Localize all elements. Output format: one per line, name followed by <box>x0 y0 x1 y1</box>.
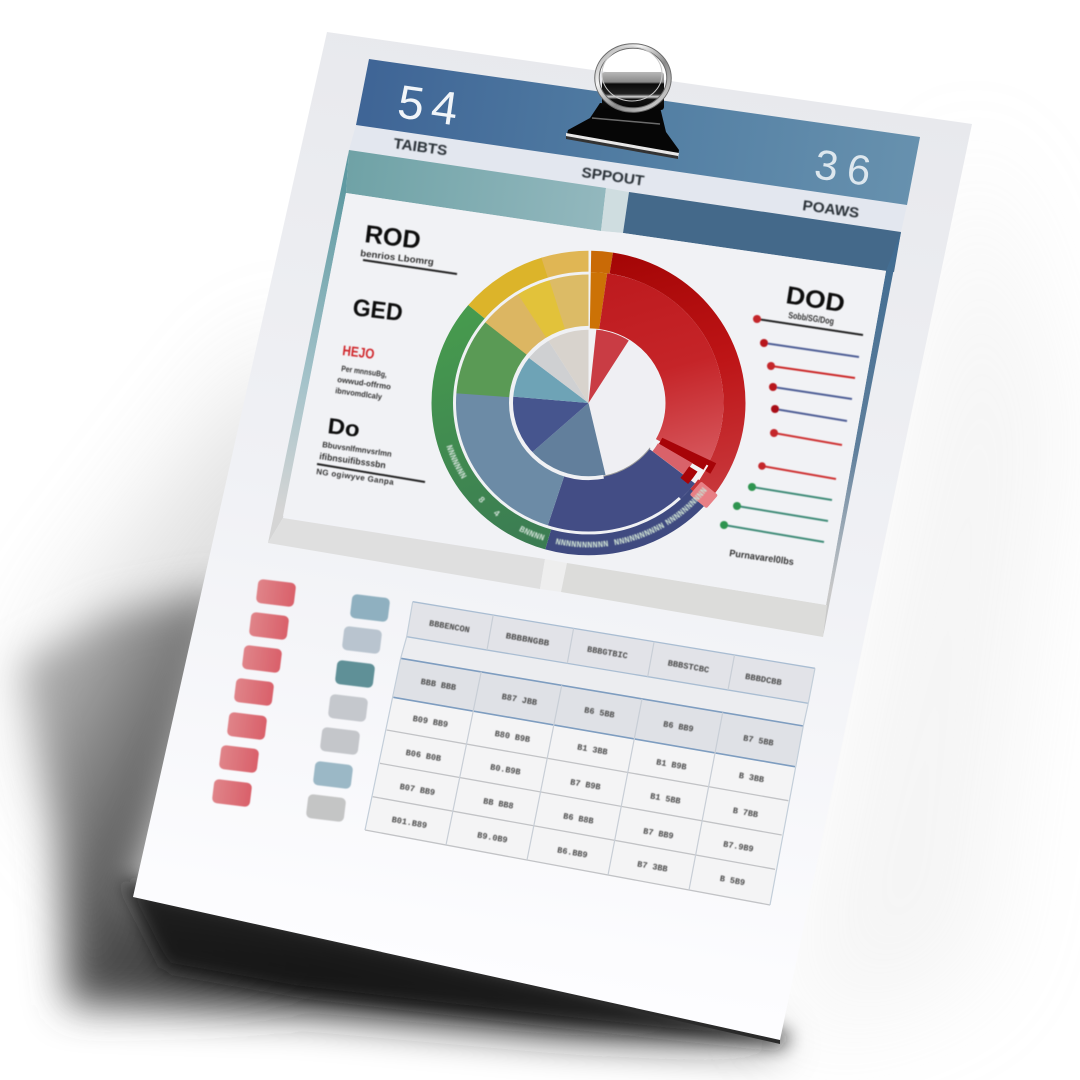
header row: BBBDCBB <box>744 672 782 688</box>
data row 2: B1 5BB <box>649 791 681 807</box>
sub header row: B87 JBB <box>501 692 538 708</box>
ring text: 4 <box>494 510 500 517</box>
Do caption: Bbuvsnlfmnvsrlmn <box>322 440 392 459</box>
left text column: NG ogiwyve Ganpa <box>316 467 395 487</box>
header row: BBBENCON <box>428 619 470 636</box>
heading Do: Do <box>326 413 361 442</box>
header row: BBBSTCBC <box>667 658 710 676</box>
clip ring <box>597 46 669 110</box>
label strip <box>349 125 907 232</box>
paragraph <box>335 364 392 402</box>
report header <box>268 59 920 637</box>
data row 3: B7.9B9 <box>722 839 754 855</box>
data row 4: B01.B89 <box>391 815 428 831</box>
data row 1: B1 B9B <box>655 757 687 773</box>
ring text: NNNNNNNNNN <box>664 486 708 526</box>
table rules <box>365 602 815 905</box>
table fills <box>365 602 815 905</box>
clip body <box>566 103 679 159</box>
inner ring segments <box>482 300 694 506</box>
data row 2: B 7BB <box>732 806 759 820</box>
paragraph: owwud-offrmo <box>337 375 392 392</box>
centre pie <box>550 366 626 440</box>
sub header row: B7 5BB <box>742 733 774 749</box>
data table <box>365 602 815 905</box>
legend line 5 <box>771 405 847 421</box>
sub header row: BBB BBB <box>420 677 457 693</box>
heading DOD: DOD <box>784 281 847 318</box>
data row 3: B6 B8B <box>562 811 594 827</box>
data row 1: B80 B9B <box>494 729 531 745</box>
ROD caption: benrios Lbomrg <box>360 248 434 267</box>
ring text: NNNNNNN <box>446 444 468 480</box>
data row 1: B 3BB <box>738 771 765 785</box>
data row 3 <box>399 782 754 855</box>
band gap <box>601 188 629 233</box>
white separator rings <box>454 273 722 533</box>
outer ring segments <box>442 261 734 545</box>
header row: BBBGTBIC <box>586 645 628 662</box>
left side strip <box>268 150 349 543</box>
dark blue band <box>623 192 901 272</box>
right legend <box>720 281 863 568</box>
data row 3: BB BB8 <box>482 796 514 812</box>
white chart panel <box>283 193 886 605</box>
legend line 7 <box>758 462 836 479</box>
data row 3: B7 BB9 <box>642 826 674 842</box>
ring text: NNNNNNNNNN <box>613 522 665 546</box>
data row 4: B9.0B9 <box>476 830 508 846</box>
ring text: 8 <box>478 496 486 504</box>
label TAIBTS: TAIBTS <box>392 136 448 160</box>
data row 4: B7 3BB <box>636 859 668 875</box>
heading GED: GED <box>351 294 404 327</box>
left text column: ifibnsuifibsssbn <box>319 451 386 470</box>
data row 3: B07 BB9 <box>399 782 436 798</box>
header row <box>428 619 782 688</box>
paper sheet <box>133 32 972 1044</box>
legend line 4 <box>769 383 852 399</box>
DOD caption: Sobb/SG/Dog <box>788 310 835 326</box>
data row 1 <box>412 714 765 785</box>
data row 2: B0.B9B <box>489 762 521 778</box>
binder clip <box>566 46 679 159</box>
data row 4: B 5B9 <box>719 874 746 888</box>
clip barrel <box>602 72 664 110</box>
data row 4 <box>391 815 746 888</box>
ring text: BNNNN <box>518 525 546 541</box>
legend line 1 <box>753 315 863 335</box>
legend line 2 <box>760 339 859 357</box>
red chip column <box>212 579 296 807</box>
ring text: NNNNNNNNNN <box>555 538 609 548</box>
ring text <box>446 444 708 548</box>
sub header row: B6 BB9 <box>662 719 694 735</box>
accent wedges <box>464 282 714 524</box>
legend line 6 <box>770 429 842 445</box>
legend line 9 <box>733 502 828 521</box>
red label: HEJO <box>342 342 375 362</box>
pink callout patch <box>690 481 718 508</box>
label POAWS: POAWS <box>801 198 860 222</box>
paragraph: ibnvomdlcaly <box>335 386 383 402</box>
sub header row: B6 5BB <box>583 705 615 721</box>
data row 2 <box>405 748 759 820</box>
data row 1: B09 BB9 <box>412 714 449 730</box>
legend line 3 <box>767 362 855 378</box>
paragraph: Per mnnsuBg, <box>341 364 388 379</box>
donut chart <box>432 250 746 556</box>
table text <box>391 619 782 888</box>
number 36: 36 <box>812 140 874 195</box>
sub header row <box>420 677 774 749</box>
header blue band <box>356 59 920 205</box>
legend line 10 <box>720 521 824 542</box>
blue grey chip column <box>306 594 390 822</box>
legend footer: Purnavarel0lbs <box>729 548 794 568</box>
heading ROD: ROD <box>363 220 422 255</box>
teal band <box>346 150 606 231</box>
legend line 8 <box>748 483 832 500</box>
data row 2: B7 B9B <box>569 777 601 793</box>
left text column <box>316 220 457 487</box>
data row 2: B06 B0B <box>405 748 442 764</box>
data row 1: B1 3BB <box>576 742 608 758</box>
lower grey strip <box>268 518 827 637</box>
header row: BBBBNGBB <box>505 631 550 649</box>
label SPPOUT: SPPOUT <box>580 165 645 190</box>
data row 4: B6.BB9 <box>556 845 588 861</box>
right side strip <box>823 232 901 637</box>
number 54: 54 <box>395 74 461 135</box>
white ticks <box>698 465 708 480</box>
